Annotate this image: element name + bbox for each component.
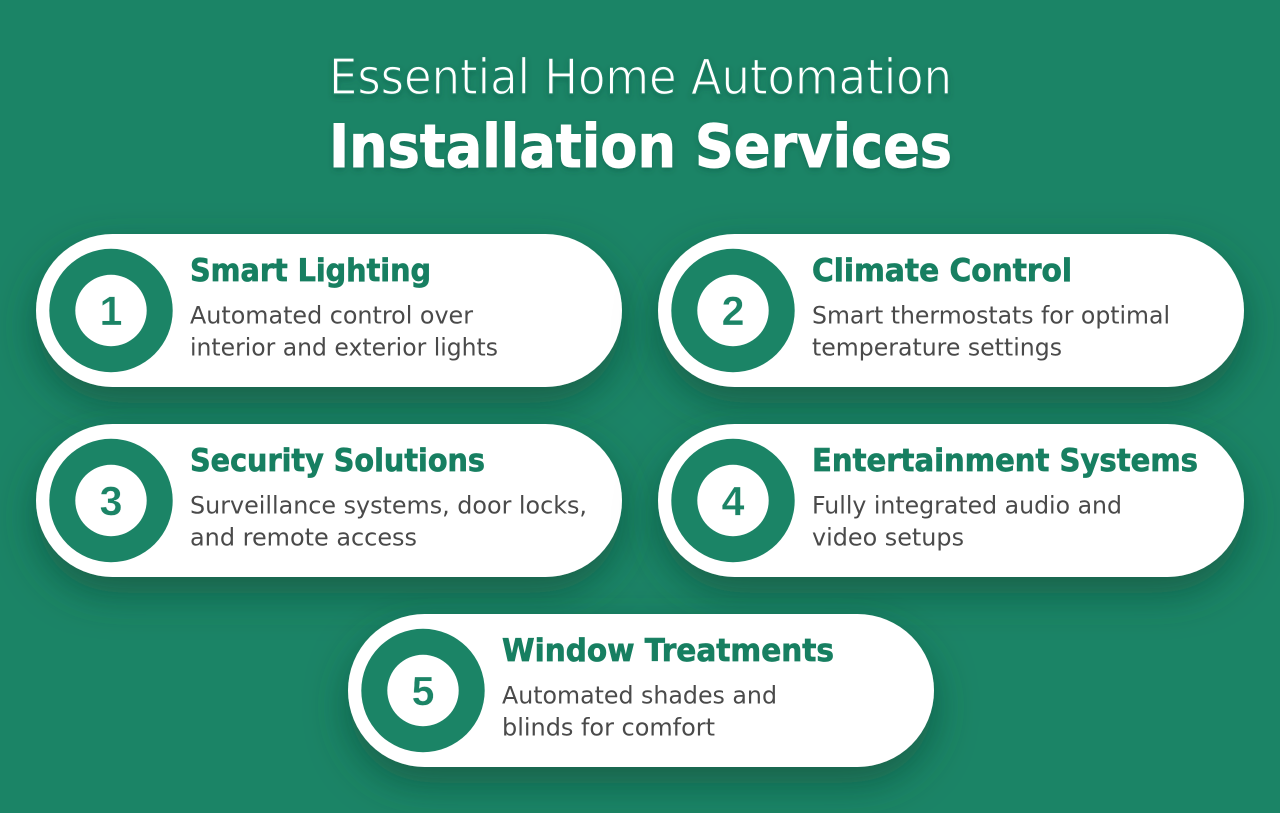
title [329,49,952,182]
panel: entertainment systems [658,424,1244,577]
panel: smart lighting: 1 [100,288,122,334]
panel: window treatments [348,614,934,767]
panel: security solutions: and remote access [190,524,417,552]
panel: entertainment systems: Entertainment Systems [812,443,1198,479]
panel: climate control: Climate Control [812,253,1072,289]
panel: security solutions: Surveillance systems, door locks, [190,492,587,520]
panel: entertainment systems: video setups [812,524,964,552]
panel: security solutions [36,424,622,577]
panel: smart lighting [36,234,622,387]
panel: smart lighting: interior and exterior lights [190,334,498,362]
panel: window treatments: blinds for comfort [502,714,715,742]
panel: window treatments: 5 [412,668,434,714]
panel: climate control [658,234,1244,387]
panel: climate control: 2 [722,288,744,334]
panel: entertainment systems: 4 [722,478,745,524]
title: Essential Home Automation [329,49,952,106]
panel: climate control: Smart thermostats for optimal [812,302,1170,330]
panel: smart lighting: Smart Lighting [190,253,431,289]
panel: entertainment systems: Fully integrated audio and [812,492,1122,520]
panel: climate control: temperature settings [812,334,1062,362]
panel: security solutions: 3 [100,478,122,524]
title: Installation Services [329,112,952,182]
panel: security solutions: Security Solutions [190,443,485,479]
panel: smart lighting: Automated control over [190,302,473,330]
panel: window treatments: Window Treatments [502,633,834,669]
panel: window treatments: Automated shades and [502,682,777,710]
